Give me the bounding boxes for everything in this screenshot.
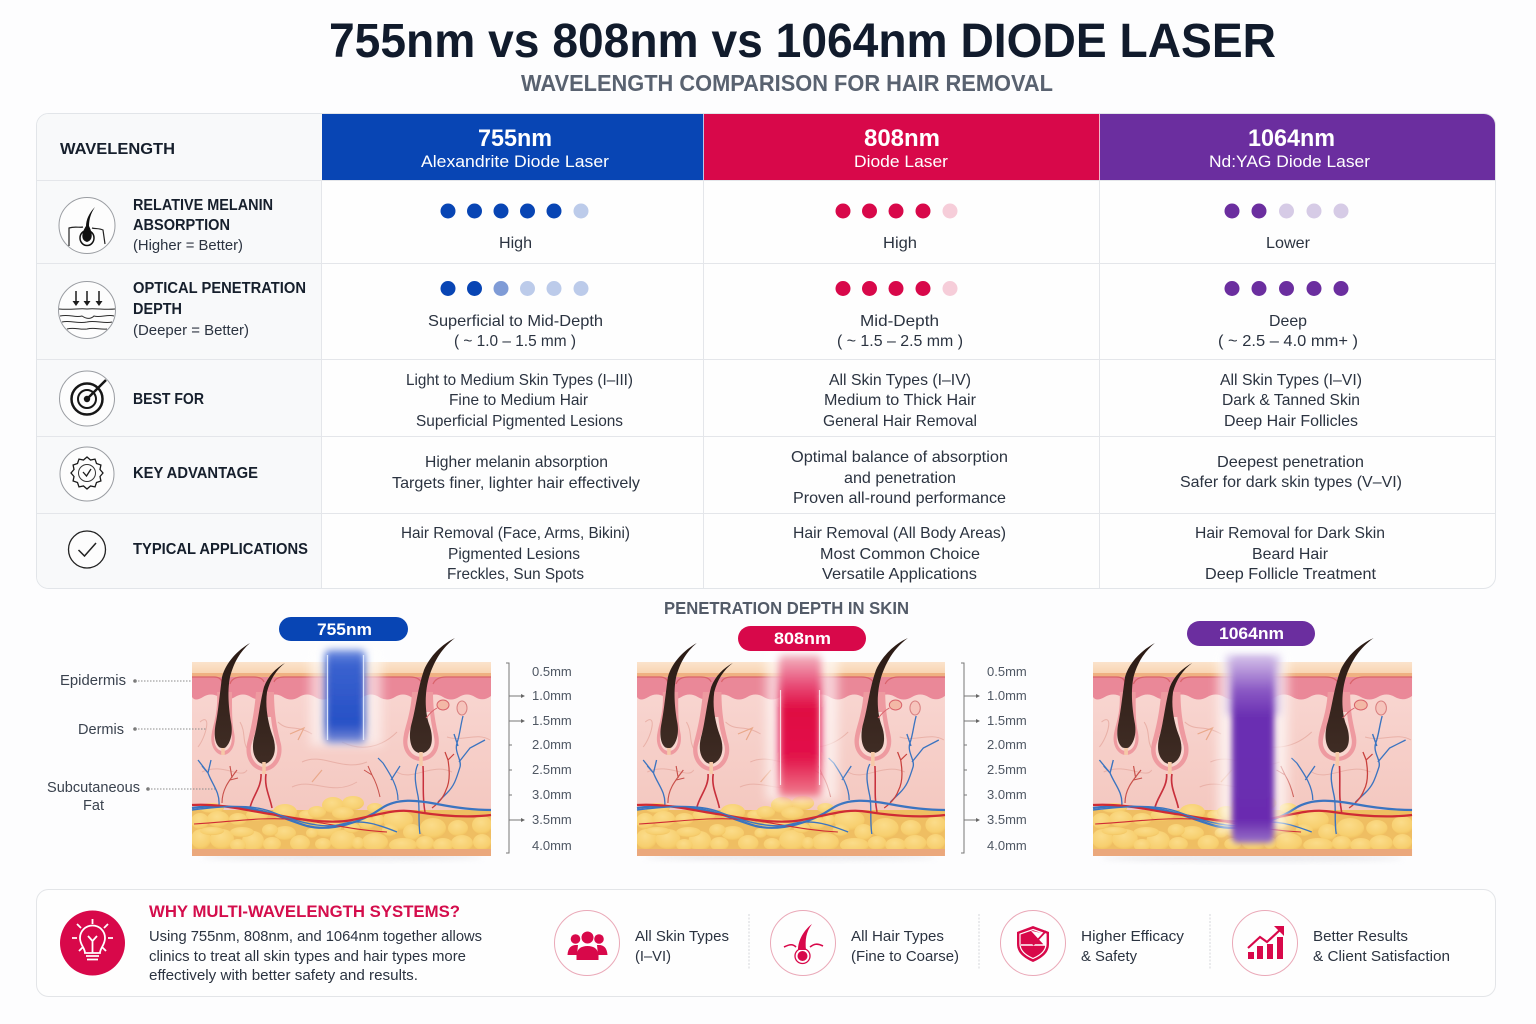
text: 1064nm applications: Hair Removal for Dark Skin [1195,525,1385,542]
label: all skin types [635,928,729,965]
depth scale: 808nm: 2.0mm [987,737,1027,752]
label: typical applications: TYPICAL APPLICATIONS [133,541,308,558]
subtitle: WAVELENGTH COMPARISON FOR HAIR REMOVAL [521,70,1053,96]
laser beam: 1064nm [1218,652,1288,843]
benefit: better results [1232,910,1450,976]
comparison table [36,114,1496,588]
text: 1064nm applications [1195,525,1385,583]
text: 1064nm best for [1220,372,1362,430]
skin layer labels [47,672,150,814]
icon: check mark [68,531,106,568]
text: 755nm applications: Hair Removal (Face, Arms, Bikini) [401,525,630,542]
text: 755nm applications: Pigmented Lesions [448,546,580,563]
laser beam: 808nm [766,648,838,800]
depth scale: 755nm: 3.0mm [532,787,572,802]
label: relative melanin absorption [133,197,273,254]
value: 1064nm melanin: Lower [1266,235,1311,252]
label: all hair types: (Fine to Coarse) [851,948,959,965]
label: better results [1313,928,1450,965]
text: 1064nm applications: Deep Follicle Treatment [1205,566,1377,583]
row: typical applications [68,525,1385,583]
icon: light bulb [60,910,125,976]
depth scale: 755nm [506,663,572,853]
label: all hair types [851,928,959,965]
title: 755nm vs 808nm vs 1064nm DIODE LASER [329,15,1276,68]
benefit: all hair types [770,910,959,976]
pill: 1064nm: 1064nm [1219,624,1284,643]
header: 808nm column: Diode Laser [854,153,949,171]
depth scale: 808nm: 1.5mm [987,713,1027,728]
icon: target [60,371,114,426]
text: 755nm key advantage: Targets finer, lighter hair effectively [392,475,640,492]
label: higher efficacy: & Safety [1081,948,1137,965]
heading: why multi-wavelength: WHY MULTI-WAVELENGTH SYSTEMS? [149,902,460,921]
text: 755nm applications: Freckles, Sun Spots [447,566,584,583]
value: 755nm depth: Superficial to Mid-Depth [428,313,603,330]
label: better results: & Client Satisfaction [1313,948,1450,965]
text: 1064nm key advantage [1180,454,1402,491]
row: optical penetration depth [58,280,1358,350]
skin layer labels: Subcutaneous [47,779,140,796]
icon: badge [60,447,114,501]
label: relative melanin absorption: ABSORPTION [133,217,230,234]
diagram: 1064nm skin cross-section [1092,638,1413,861]
text: 808nm key advantage: and penetration [844,470,956,487]
header: 755nm column: 755nm [478,125,552,152]
dots: 808nm melanin, 4 of 5 [836,204,958,218]
label: higher efficacy [1081,928,1185,965]
text: 808nm best for: Medium to Thick Hair [824,392,977,409]
depth scale: 755nm: 4.0mm [532,838,572,853]
header: 808nm column [704,114,1100,180]
panel: why multi-wavelength systems [36,890,1496,996]
depth scale: 808nm [961,663,1027,853]
icon: penetration arrows over skin layers [58,282,116,338]
value: 1064nm depth: ( ~ 2.5 – 4.0 mm+ ) [1218,333,1358,350]
value: 808nm depth [837,313,963,350]
depth scale: 755nm: 1.0mm [532,688,572,703]
text: 755nm key advantage [392,454,640,492]
depth scale: 808nm: 2.5mm [987,762,1027,777]
text: 1064nm best for: All Skin Types (I–VI) [1220,372,1362,389]
text: 808nm best for: General Hair Removal [823,413,977,430]
label: better results: Better Results [1313,928,1408,945]
pill: 808nm [738,626,866,651]
label: optical penetration depth: OPTICAL PENETRATION [133,280,306,297]
value: 755nm depth [428,313,603,350]
value: 808nm depth: Mid-Depth [860,313,939,330]
header: 808nm column: 808nm [864,125,940,152]
label: optical penetration depth: (Deeper = Better) [133,322,249,339]
depth scale: 808nm: 4.0mm [987,838,1027,853]
depth scale: 755nm: 2.5mm [532,762,572,777]
benefit: higher efficacy and safety [1000,910,1185,976]
text: 808nm key advantage: Proven all-round performance [793,490,1006,507]
depth scale: 808nm: 1.0mm [987,688,1027,703]
dots: 755nm depth [440,281,588,296]
depth scale: 755nm: 1.5mm [532,713,572,728]
label: higher efficacy: Higher Efficacy [1081,928,1185,945]
dots: 1064nm melanin, 2 of 5 [1224,204,1348,218]
depth scale: 755nm: 3.5mm [532,812,572,827]
pill: 755nm: 755nm [317,620,372,639]
skin layer labels: Fat [83,797,105,814]
text: explanation: Using 755nm, 808nm, and 1064nm together allows [149,928,482,945]
pill: 808nm: 808nm [774,629,831,648]
pill: 1064nm [1187,621,1315,646]
value: 808nm depth: ( ~ 1.5 – 2.5 mm ) [837,333,963,350]
text: 808nm applications: Versatile Applications [822,566,977,583]
laser beam: 755nm [310,650,382,746]
dots: 1064nm depth [1224,281,1348,296]
text: 755nm applications [401,525,630,583]
text: 1064nm key advantage: Safer for dark skin types (V–VI) [1180,474,1402,491]
depth scale: 755nm: 0.5mm [532,664,572,679]
skin layer labels: Dermis [78,721,124,738]
text: 808nm best for: All Skin Types (I–IV) [829,372,971,389]
text: 755nm key advantage: Higher melanin absorption [425,454,608,471]
benefit: all skin types [554,910,729,976]
label: relative melanin absorption: (Higher = Better) [133,237,243,254]
text: explanation: effectively with better safety and results. [149,967,418,984]
depth scale: 808nm: 3.5mm [987,812,1027,827]
text: 755nm best for: Fine to Medium Hair [449,392,589,409]
text: 1064nm best for: Dark & Tanned Skin [1222,392,1360,409]
skin layer labels: Epidermis [60,672,126,689]
text: explanation: clinics to treat all skin types and hair types more [149,948,466,965]
text: explanation [149,928,482,984]
depth scale: 808nm: 0.5mm [987,664,1027,679]
text: 808nm best for [823,372,977,430]
label: optical penetration depth [133,280,306,339]
text: 808nm applications [793,525,1006,583]
value: 808nm melanin: High [883,235,917,252]
dots: 808nm depth [836,281,958,296]
text: 808nm key advantage: Optimal balance of absorption [791,449,1008,466]
diagram: 808nm skin cross-section [636,638,946,860]
pill: 755nm [279,617,408,641]
label: key advantage: KEY ADVANTAGE [133,465,258,482]
label: all skin types: All Skin Types [635,928,729,945]
text: 1064nm applications: Beard Hair [1252,546,1329,563]
text: 808nm applications: Hair Removal (All Body Areas) [793,525,1006,542]
value: 1064nm depth: Deep [1269,313,1307,330]
text: 1064nm best for: Deep Hair Follicles [1224,413,1358,430]
icon: hair follicle [59,198,115,254]
label: best for: BEST FOR [133,391,204,408]
text: 755nm best for: Light to Medium Skin Types (I–III) [406,372,633,389]
text: 808nm key advantage [791,449,1008,507]
text: 1064nm key advantage: Deepest penetration [1217,454,1364,471]
row: relative melanin absorption [59,197,1348,254]
label: optical penetration depth: DEPTH [133,301,182,318]
text: 755nm best for [406,372,633,430]
label: relative melanin absorption: RELATIVE MELANIN [133,197,273,214]
header: 1064nm column [1100,114,1495,180]
header: 1064nm column: Nd:YAG Diode Laser [1209,153,1371,171]
depth scale: 808nm: 3.0mm [987,787,1027,802]
depth scale: 755nm: 2.0mm [532,737,572,752]
value: 755nm melanin: High [499,235,532,252]
dots: 755nm melanin, 5 of 6 [440,204,588,218]
value: 755nm depth: ( ~ 1.0 – 1.5 mm ) [454,333,576,350]
text: 755nm best for: Superficial Pigmented Lesions [416,413,623,430]
row: key advantage [60,447,1402,507]
label: all skin types: (I–VI) [635,948,671,965]
header: 755nm column: Alexandrite Diode Laser [421,153,610,171]
text: 808nm applications: Most Common Choice [820,546,980,563]
section heading: penetration depth: PENETRATION DEPTH IN SKIN [664,598,909,618]
row: best for [60,371,1362,430]
header: wavelength label: WAVELENGTH [60,141,175,158]
header: 1064nm column: 1064nm [1248,125,1335,152]
diagram: 755nm skin cross-section [135,638,492,860]
value: 1064nm depth [1218,313,1358,350]
header: 755nm column [322,114,704,180]
label: all hair types: All Hair Types [851,928,944,945]
